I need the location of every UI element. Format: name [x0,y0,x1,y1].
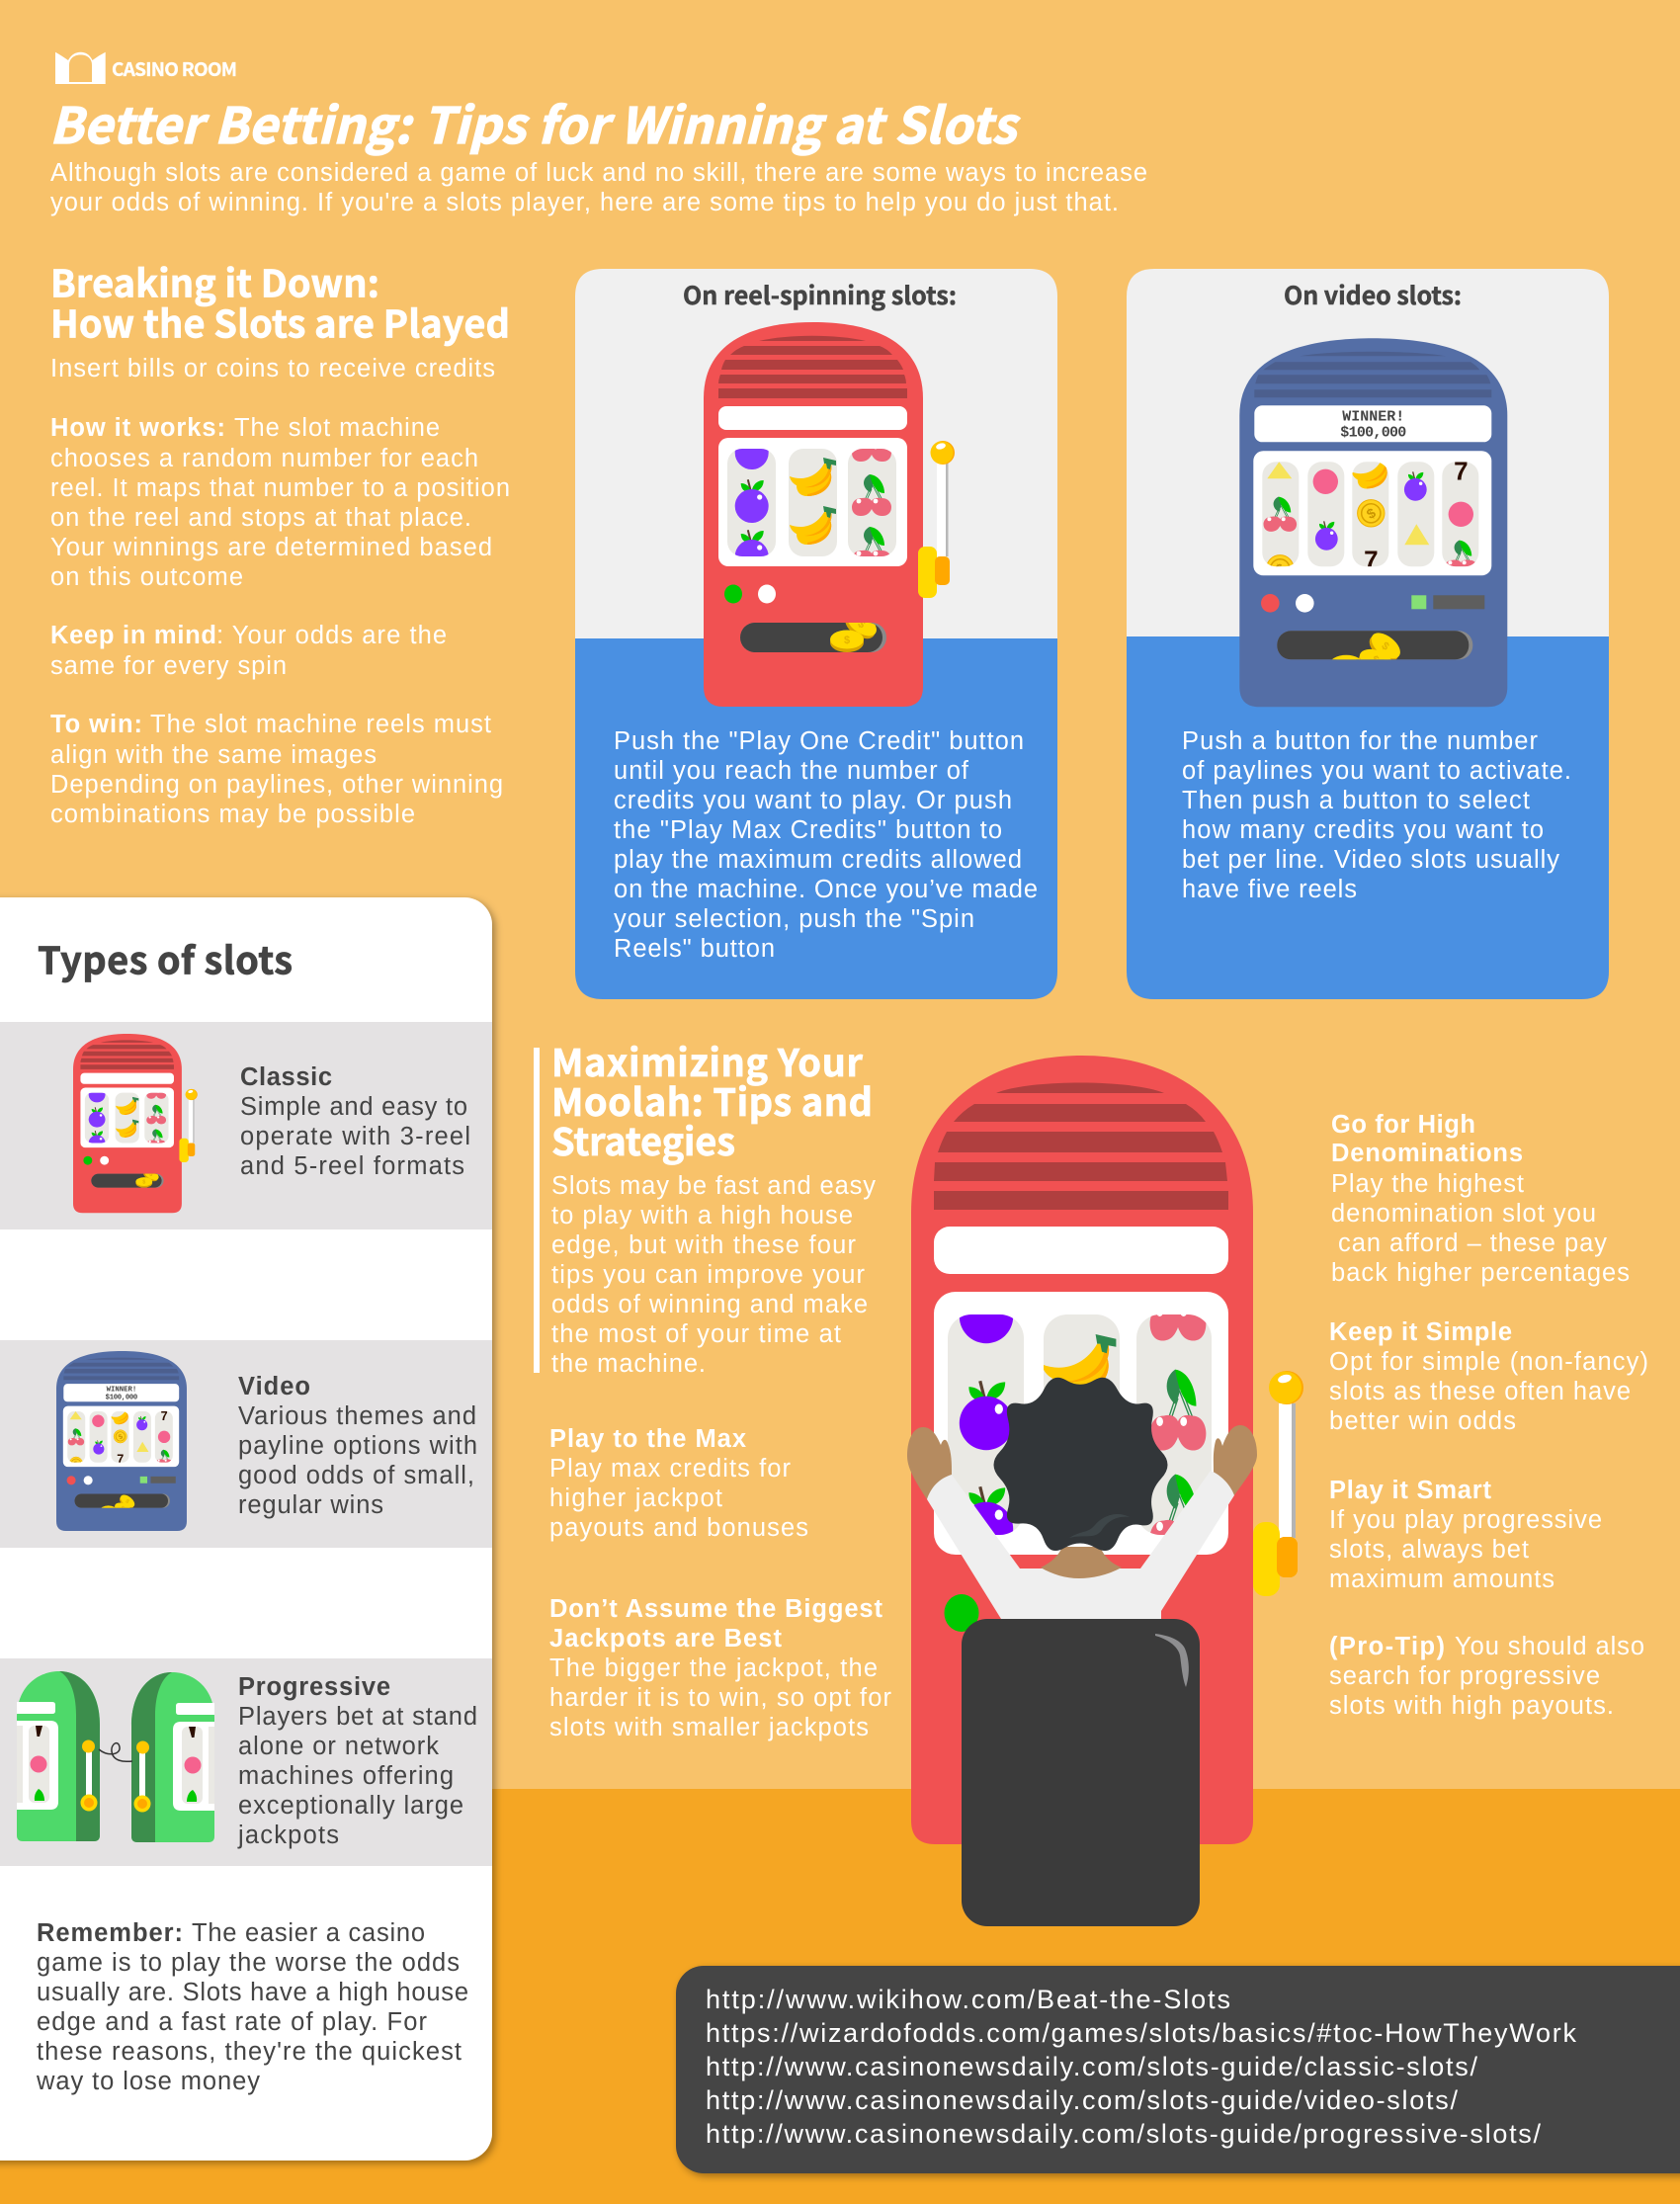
text: maximizing intro: Slots may be fast and easy [551,1172,876,1200]
tip: high denominations: Play the highest [1331,1170,1524,1198]
text: source urls: http://www.casinonewsdaily.com/slots-guide/progressive-slots/ [706,2119,1541,2149]
text: remember: Remember: [37,1919,183,1947]
floor band [0,1789,1680,2204]
text: how slots work: The slot machine [234,414,440,442]
text: remember: way to lose money [36,2068,260,2095]
text: source urls: http://www.casinonewsdaily.com/slots-guide/video-slots/ [706,2085,1458,2115]
text: progressive: exceptionally large [238,1792,463,1820]
text: video slot instructions: Then push a button to select [1182,787,1530,814]
tip: keep it simple: better win odds [1329,1407,1516,1435]
text: how slots work: same for every spin [50,652,287,680]
text: classic: operate with 3-reel [240,1123,470,1150]
text: how slots work: combinations may be possible [50,801,415,828]
heading: breaking it down [50,253,510,348]
tip: play to the max: higher jackpot [549,1484,722,1512]
text: how slots work: Keep in mind [50,622,216,649]
tip: play it smart: slots, always bet [1329,1536,1529,1564]
text: reel-spinning instructions: Reels" button [614,935,775,963]
tip: play to the max [549,1425,808,1542]
heading block: maximizing your moolah: Strategies [551,1112,735,1166]
tip: biggest jackpots: harder it is to win, so opt for [549,1684,891,1712]
text: maximizing intro: odds of winning and make [551,1291,868,1318]
text: how slots work: align with the same images [50,741,377,769]
text: video: regular wins [238,1491,383,1519]
text: how slots work: Insert bills or coins to receive credits [50,355,495,382]
heading block: maximizing your moolah [534,1033,876,1378]
intro paragraph [50,159,1147,216]
text: video slot instructions: Push a button for the number [1182,727,1538,755]
text: reel-spinning instructions: the "Play Max Credits" button to [614,816,1002,844]
text: remember: these reasons, they're the quickest [37,2038,462,2066]
tip: pro-tip: (Pro-Tip) [1329,1633,1445,1660]
text: reel-spinning instructions: credits you want to play. Or push [614,787,1012,814]
tip: keep it simple: Opt for simple (non-fancy) [1329,1348,1648,1376]
title: Better Betting: Tips for Winning at Slots [49,87,1021,158]
tip: play it smart: If you play progressive [1329,1506,1602,1534]
machine lever [1269,1371,1303,1577]
tip: pro-tip: slots with high payouts. [1329,1692,1614,1720]
text: progressive: Progressive [238,1673,390,1701]
tip: biggest jackpots: The bigger the jackpot, the [549,1654,878,1682]
tip: biggest jackpots: slots with smaller jackpots [549,1714,869,1741]
player: shirt and arms [927,1471,1234,1621]
text: reel-spinning instructions: until you reach the number of [614,757,969,785]
text: video slot instructions: have five reels [1182,876,1357,903]
tip: play it smart [1329,1477,1602,1593]
row: progressive [0,1658,492,1866]
machine vents [934,1083,1228,1210]
intro paragraph: your odds of winning. If you're a slots player, here are some tips to help you do just that. [50,189,1119,216]
player: hands [907,1425,1257,1499]
text: how slots work: on this outcome [50,563,243,591]
text: classic: Classic [240,1063,332,1091]
text: video slot instructions [1182,727,1571,903]
tip: pro-tip: search for progressive [1329,1662,1600,1690]
text: remember: edge and a fast rate of play. For [37,2008,427,2036]
text: maximizing intro: tips you can improve your [551,1261,866,1289]
illustration: red slot machine [704,322,955,707]
heading block: maximizing your moolah: Moolah: Tips and [551,1072,873,1127]
logo: Casino Room: CASINO ROOM [112,55,237,82]
text: classic [240,1063,470,1180]
text: maximizing intro: the most of your time at [551,1320,841,1348]
text: video [238,1373,477,1519]
text: reel-spinning instructions: on the machine. Once you’ve made [614,876,1038,903]
text: how slots work: Depending on paylines, other winning [50,771,503,799]
text: how slots work: The slot machine reels must [150,711,491,738]
text: reel-spinning instructions: Push the "Play One Credit" button [614,727,1024,755]
text: how slots work: Your winnings are determined based [50,534,492,561]
tip: high denominations: can afford – these pay [1338,1229,1607,1257]
text: how slots work: To win: [50,711,142,738]
text: reel-spinning instructions [614,727,1038,963]
text: video: Video [238,1373,310,1400]
text: source urls: http://www.casinonewsdaily.com/slots-guide/classic-slots/ [706,2052,1477,2081]
text: progressive [237,1673,477,1849]
text: video slot instructions: of paylines you want to activate. [1182,757,1571,785]
heading: on reel-spinning slots: On reel-spinning slots: [683,277,957,312]
tip: play it smart: maximum amounts [1329,1566,1554,1593]
panel: types of slots [0,897,492,2161]
icon: video machine [56,1351,187,1531]
illustration: big slot machine with player [907,1056,1303,1926]
text: progressive: jackpots [237,1822,339,1849]
text: remember: usually are. Slots have a high house [37,1979,468,2006]
icon: linked green machines [17,1671,214,1842]
panel: reel-spinning slots [575,269,1057,999]
player: back / chair [962,1619,1200,1926]
tip: high denominations: Go for High [1331,1111,1475,1139]
panel: sources [676,1966,1680,2173]
text: remember [36,1919,468,2095]
text: reel-spinning instructions: play the maximum credits allowed [614,846,1022,874]
intro paragraph: Although slots are considered a game of luck and no skill, there are some ways to increase [50,159,1147,187]
text: progressive: Players bet at stand [238,1703,477,1731]
text: maximizing intro: edge, but with these four [551,1231,856,1259]
tip: biggest jackpots [549,1595,891,1741]
text: video slot instructions: how many credits you want to [1182,816,1544,844]
row: classic [0,1022,492,1229]
text: classic: Simple and easy to [240,1093,467,1121]
panel: video slots [1127,269,1609,999]
text: video: Various themes and [238,1402,476,1430]
text: how slots work: How it works: [50,414,225,442]
heading: breaking it down: How the Slots are Played [50,295,510,348]
heading: on video slots: On video slots: [1284,277,1462,312]
text: maximizing intro: the machine. [551,1350,706,1378]
text: source urls: https://wizardofodds.com/games/slots/basics/#toc-HowTheyWork [706,2018,1577,2048]
player: hair [994,1378,1168,1551]
text: how slots work: on the reel and stops at that place. [50,504,471,532]
tip: play it smart: Play it Smart [1329,1477,1492,1504]
tip: keep it simple: Keep it Simple [1329,1318,1512,1346]
text: video: payline options with [238,1432,477,1460]
text: video: good odds of small, [238,1462,474,1489]
text: how slots work [50,355,510,828]
tip: keep it simple [1329,1318,1648,1435]
text: progressive: alone or network [238,1733,439,1760]
logo: Casino Room [55,52,237,84]
text: how slots work: : Your odds are the [216,622,447,649]
text: classic: and 5-reel formats [240,1152,464,1180]
text: progressive: machines offering [238,1762,454,1790]
tip: biggest jackpots: Jackpots are Best [549,1625,783,1653]
icon: classic machine [73,1034,198,1213]
text: how slots work: reel. It maps that number to a position [50,474,510,502]
tip: pro-tip [1329,1633,1644,1720]
tip: keep it simple: slots as these often have [1329,1378,1631,1405]
player: neck [1041,1547,1122,1578]
tip: play to the max: Play to the Max [549,1425,746,1453]
heading: types of slots: Types of slots [38,931,293,984]
tip: high denominations: Denominations [1331,1140,1523,1167]
machine reels [934,1292,1228,1555]
tip: pro-tip: You should also [1455,1633,1644,1660]
machine button [945,1594,978,1632]
tip: high denominations: back higher percentages [1331,1259,1630,1287]
machine body [911,1056,1253,1844]
heading: breaking it down: Breaking it Down: [50,253,379,308]
tip: biggest jackpots: Don’t Assume the Biggest [549,1595,883,1623]
tip: play to the max: Play max credits for [549,1455,791,1483]
machine display [934,1227,1228,1274]
tip: high denominations [1331,1111,1630,1287]
heading block: maximizing your moolah: Maximizing Your [551,1033,863,1087]
text: maximizing intro: to play with a high house [551,1202,853,1229]
tip: high denominations: denomination slot you [1331,1200,1596,1228]
text: remember: game is to play the worse the odds [37,1949,460,1977]
text: remember: The easier a casino [192,1919,425,1947]
text: source urls: http://www.wikihow.com/Beat-the-Slots [706,1985,1230,2014]
illustration: blue slot machine [1239,338,1507,707]
text: how slots work: chooses a random number for each [50,445,478,472]
text: maximizing intro [551,1172,876,1378]
tip: play to the max: payouts and bonuses [549,1514,808,1542]
text: source urls [706,1985,1577,2149]
row: video [0,1340,492,1548]
text: reel-spinning instructions: your selection, push the "Spin [614,905,974,933]
text: video slot instructions: bet per line. Video slots usually [1182,846,1559,874]
